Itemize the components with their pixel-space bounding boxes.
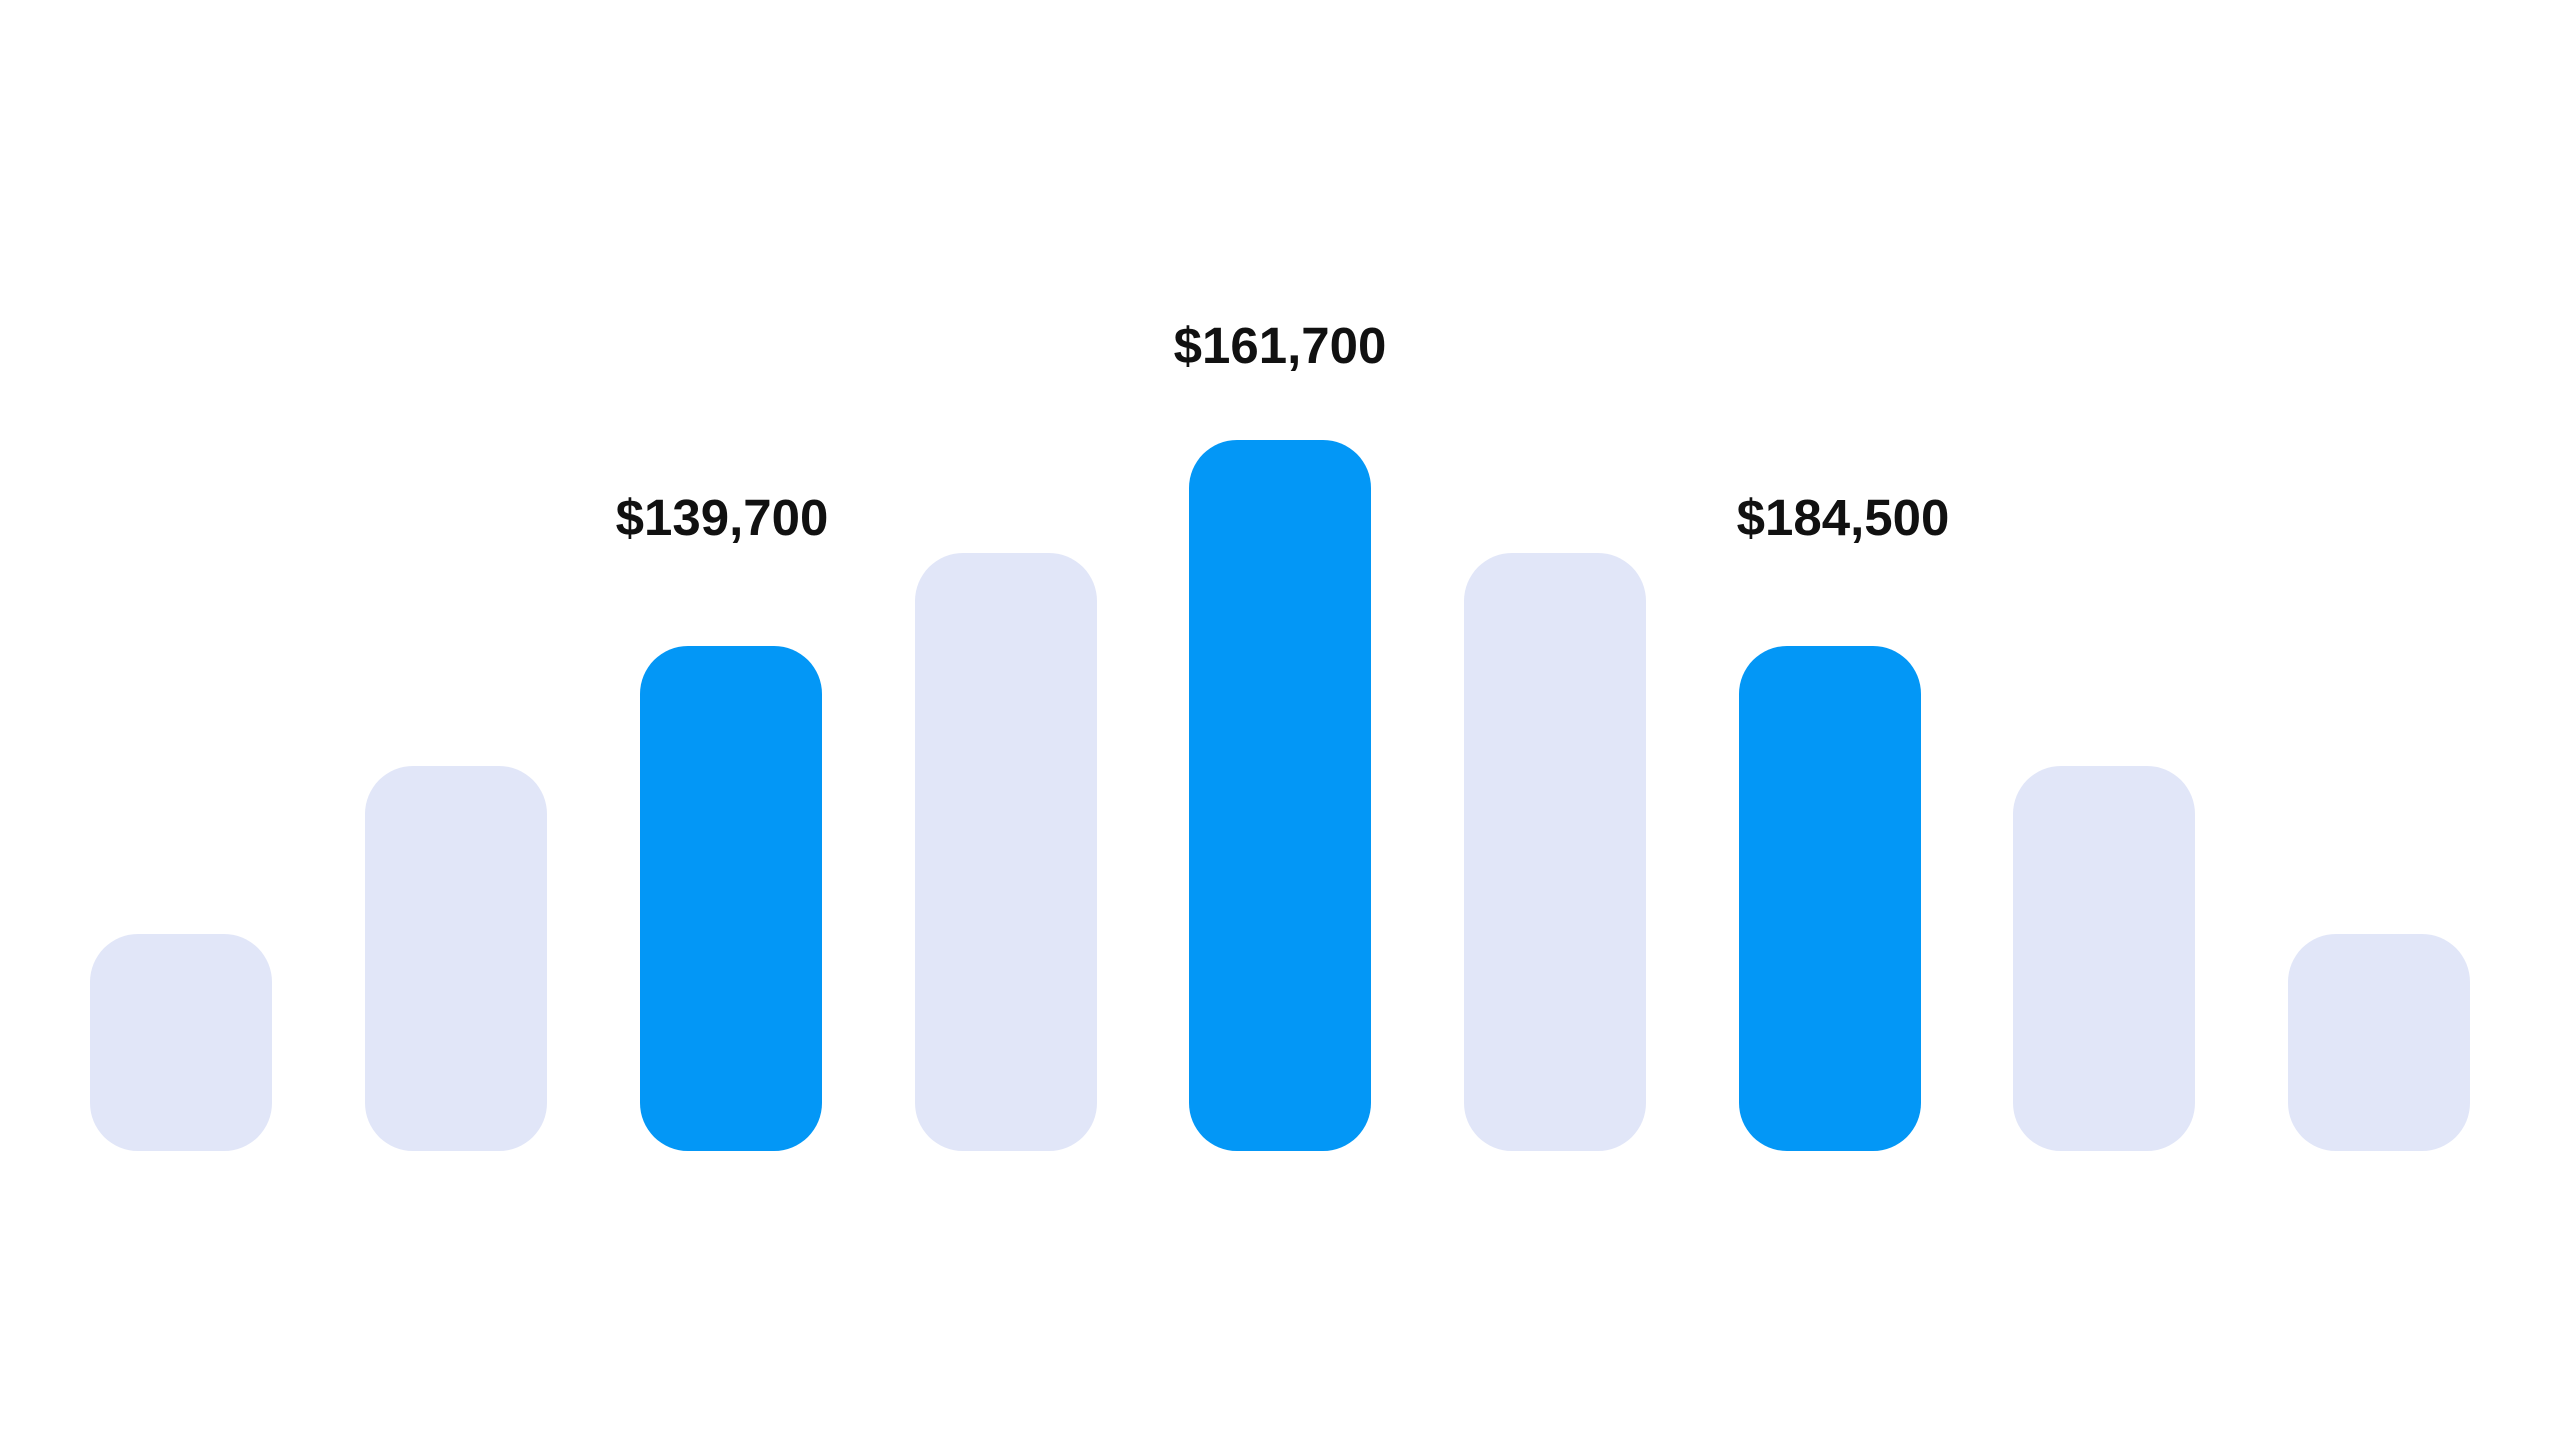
- bar 9: [2288, 934, 2470, 1151]
- label: $139,700: $139,700: [616, 489, 828, 546]
- bar 7 highlighted: [1739, 646, 1921, 1151]
- label: $161,700: $161,700: [1174, 317, 1386, 374]
- bar 2: [365, 766, 547, 1151]
- bar 8: [2013, 766, 2195, 1151]
- bar 6: [1464, 553, 1646, 1151]
- bar 3 highlighted: [640, 646, 822, 1151]
- label: $184,500: $184,500: [1737, 489, 1949, 546]
- bar 5 highlighted: [1189, 440, 1371, 1151]
- bar 4: [915, 553, 1097, 1151]
- bar 1: [90, 934, 272, 1151]
